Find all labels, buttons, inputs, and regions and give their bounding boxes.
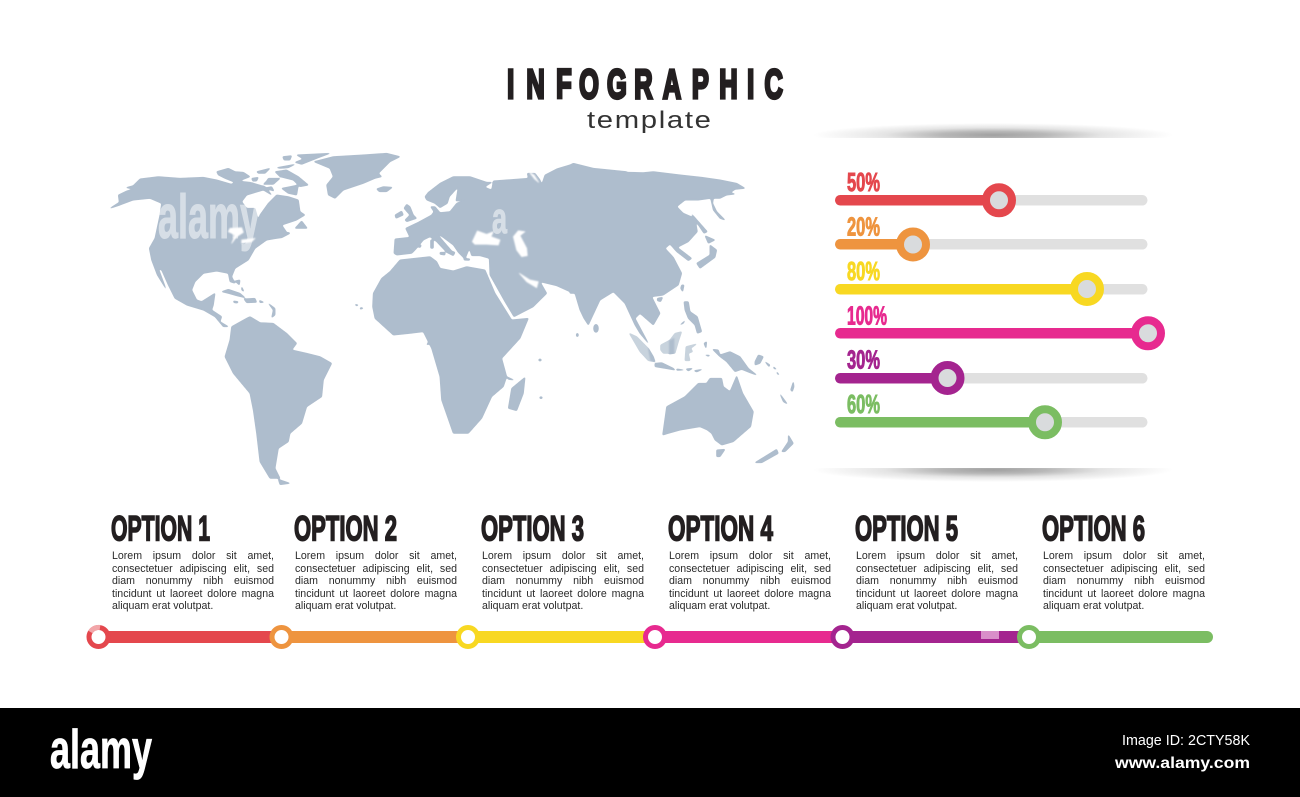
option 5 xyxy=(855,510,1018,612)
option 5: aliquam erat volutpat. xyxy=(856,600,957,612)
node 4 xyxy=(646,628,664,646)
world map xyxy=(110,152,794,485)
option 4: aliquam erat volutpat. xyxy=(669,600,770,612)
title xyxy=(507,62,784,133)
option 1 xyxy=(111,510,274,612)
option 4: Lorem ipsum dolor sit amet, xyxy=(669,550,831,562)
central asia, india xyxy=(373,163,627,433)
option 1: aliquam erat volutpat. xyxy=(112,600,213,612)
bar: 100%: 100% xyxy=(847,302,887,330)
panel top shadow xyxy=(835,124,1152,138)
option 1: consectetuer adipiscing elit, sed xyxy=(112,563,274,575)
option 2 xyxy=(294,510,457,612)
bar: 50% xyxy=(835,169,1148,213)
timeline segments xyxy=(98,631,1213,643)
node 5 xyxy=(833,628,852,646)
option 4: tincidunt ut laoreet dolore magna xyxy=(669,588,831,600)
timeline xyxy=(86,624,1213,649)
land masses xyxy=(110,153,794,485)
option 1: tincidunt ut laoreet dolore magna xyxy=(112,588,274,600)
watermarked islands xyxy=(629,332,697,362)
option 5: Lorem ipsum dolor sit amet, xyxy=(856,550,1018,562)
bar: 80%: 80% xyxy=(847,258,880,286)
option 1: Lorem ipsum dolor sit amet, xyxy=(112,550,274,562)
option 2: Lorem ipsum dolor sit amet, xyxy=(295,550,457,562)
africa xyxy=(373,257,528,433)
bar: 30%: 30% xyxy=(847,347,880,375)
option 3: consectetuer adipiscing elit, sed xyxy=(482,563,644,575)
option 4 xyxy=(668,510,831,612)
node 1 xyxy=(89,627,108,646)
image id: Image ID: 2CTY58K xyxy=(1122,733,1250,749)
option 6: diam nonummy nibh euismod xyxy=(1043,575,1205,587)
watermark letter on russia: a xyxy=(492,194,507,243)
europe, western asia xyxy=(394,165,570,317)
option 3: aliquam erat volutpat. xyxy=(482,600,583,612)
option 6: consectetuer adipiscing elit, sed xyxy=(1043,563,1205,575)
progress bars panel xyxy=(835,124,1165,480)
bar: 60% xyxy=(835,391,1148,435)
bar: 50%: 50% xyxy=(847,169,880,197)
option 6 xyxy=(1042,510,1205,612)
bar: 30% xyxy=(835,347,1148,391)
option 4: diam nonummy nibh euismod xyxy=(669,575,831,587)
option 6: aliquam erat volutpat. xyxy=(1043,600,1144,612)
option 5: tincidunt ut laoreet dolore magna xyxy=(856,588,1018,600)
option 5: consectetuer adipiscing elit, sed xyxy=(856,563,1018,575)
option 3: Lorem ipsum dolor sit amet, xyxy=(482,550,644,562)
inland seas xyxy=(472,173,539,288)
bar: 100% xyxy=(835,302,1161,346)
option 5: diam nonummy nibh euismod xyxy=(856,575,1018,587)
option 6: tincidunt ut laoreet dolore magna xyxy=(1043,588,1205,600)
bar: 80% xyxy=(835,258,1148,302)
option 2: aliquam erat volutpat. xyxy=(295,600,396,612)
bar: 60%: 60% xyxy=(847,391,880,419)
bar: 20% xyxy=(835,213,1148,258)
option 3: tincidunt ut laoreet dolore magna xyxy=(482,588,644,600)
east asia, indonesia, australia xyxy=(600,172,794,463)
footer logo: alamy xyxy=(50,718,152,780)
option 3: diam nonummy nibh euismod xyxy=(482,575,644,587)
south america xyxy=(225,317,332,485)
option 1: diam nonummy nibh euismod xyxy=(112,575,274,587)
option 6: Lorem ipsum dolor sit amet, xyxy=(1043,550,1205,562)
node 2 xyxy=(272,628,291,646)
panel bottom shadow xyxy=(835,468,1152,480)
option 2: diam nonummy nibh euismod xyxy=(295,575,457,587)
option 3 xyxy=(481,510,644,612)
bar: 20%: 20% xyxy=(847,213,880,241)
node 6 xyxy=(1020,628,1038,646)
website: www.alamy.com xyxy=(1114,755,1250,772)
node 3 xyxy=(458,628,478,646)
north america and greenland xyxy=(110,153,400,327)
subheading: template: template xyxy=(587,106,711,133)
option 2: tincidunt ut laoreet dolore magna xyxy=(295,588,457,600)
footer band xyxy=(0,708,1300,797)
heading: INFOGRAPHIC: INFOGRAPHIC xyxy=(507,62,783,108)
watermark on north america: alamy xyxy=(158,183,260,252)
option 2: consectetuer adipiscing elit, sed xyxy=(295,563,457,575)
option 4: consectetuer adipiscing elit, sed xyxy=(669,563,831,575)
